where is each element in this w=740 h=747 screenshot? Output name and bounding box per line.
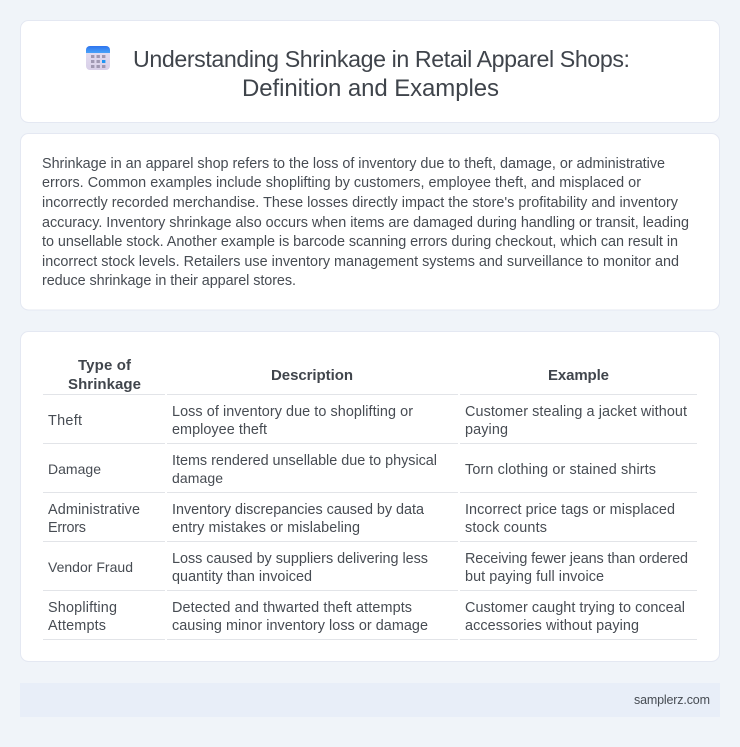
text block: definition: errors. Common examples include shoplifting by customers, employee theft, and misplaced or [42,175,641,191]
icon: calendar [86,46,110,70]
row: theft: paying [465,422,508,438]
table header row: Shrinkage [68,376,141,393]
footer source text: samplerz.com [634,693,710,707]
row: shoplifting attempts: Shoplifting [48,600,117,616]
text block: definition: incorrect stock levels. Retailers use inventory management systems and surveillance to monitor and [42,254,679,270]
text block: definition: to unsellable stock. Another example is barcode scanning errors during checkout, which can result in [42,234,678,250]
row: shoplifting attempts [48,600,685,634]
row: damage: Damage [48,461,101,477]
row: damage: Items rendered unsellable due to physical [172,453,437,469]
table header row: Description [271,367,353,384]
row: shoplifting attempts: Detected and thwarted theft attempts [172,600,412,616]
row: theft: Loss of inventory due to shoplifting or [172,404,413,420]
row: damage: damage [172,470,223,486]
row: vendor fraud: Receiving fewer jeans than ordered [465,551,688,567]
panel: intro paragraph [20,134,720,310]
footer bar [20,683,720,717]
row: shoplifting attempts: accessories without paying [465,618,639,634]
row: theft: Customer stealing a jacket without [465,404,687,420]
title [133,46,630,102]
table header row: Example [548,367,609,384]
row: vendor fraud: but paying full invoice [465,569,604,585]
row: damage [48,453,656,486]
row: theft [48,404,687,438]
row: administrative errors [48,502,675,536]
panel: shrinkage table [20,332,720,662]
text block: definition: reduce shrinkage in their apparel stores. [42,273,296,289]
row: vendor fraud: Vendor Fraud [48,559,133,575]
row: vendor fraud: Loss caused by suppliers delivering less [172,551,428,567]
row: shoplifting attempts: causing minor inventory loss or damage [172,618,428,634]
row: vendor fraud [48,551,688,585]
table header row: Type of [78,357,132,374]
row: administrative errors: Incorrect price tags or misplaced [465,502,675,518]
text block: definition: accuracy. Inventory shrinkage also occurs when items are damaged during handling or transit, leading [42,215,689,231]
panel: title header [20,20,720,122]
row: administrative errors: Administrative [48,502,140,518]
title: Definition and Examples [242,75,499,102]
text block: definition: incorrectly recorded merchandise. These losses directly impact the store's profitability and inventory [42,195,679,211]
row: administrative errors: entry mistakes or mislabeling [172,520,360,536]
row: administrative errors: Errors [48,520,86,536]
row: shoplifting attempts: Attempts [48,618,106,634]
row: vendor fraud: quantity than invoiced [172,569,312,585]
row: theft: Theft [48,413,82,429]
row: shoplifting attempts: Customer caught trying to conceal [465,600,685,616]
row: administrative errors: stock counts [465,520,547,536]
row: damage: Torn clothing or stained shirts [465,462,656,478]
row: theft: employee theft [172,422,267,438]
title: Understanding Shrinkage in Retail Apparel Shops: [133,46,630,72]
text block: definition [42,156,689,289]
table header row [68,357,609,393]
text block: definition: Shrinkage in an apparel shop refers to the loss of inventory due to theft, damage, or administrative [42,156,665,172]
row: administrative errors: Inventory discrepancies caused by data [172,502,424,518]
